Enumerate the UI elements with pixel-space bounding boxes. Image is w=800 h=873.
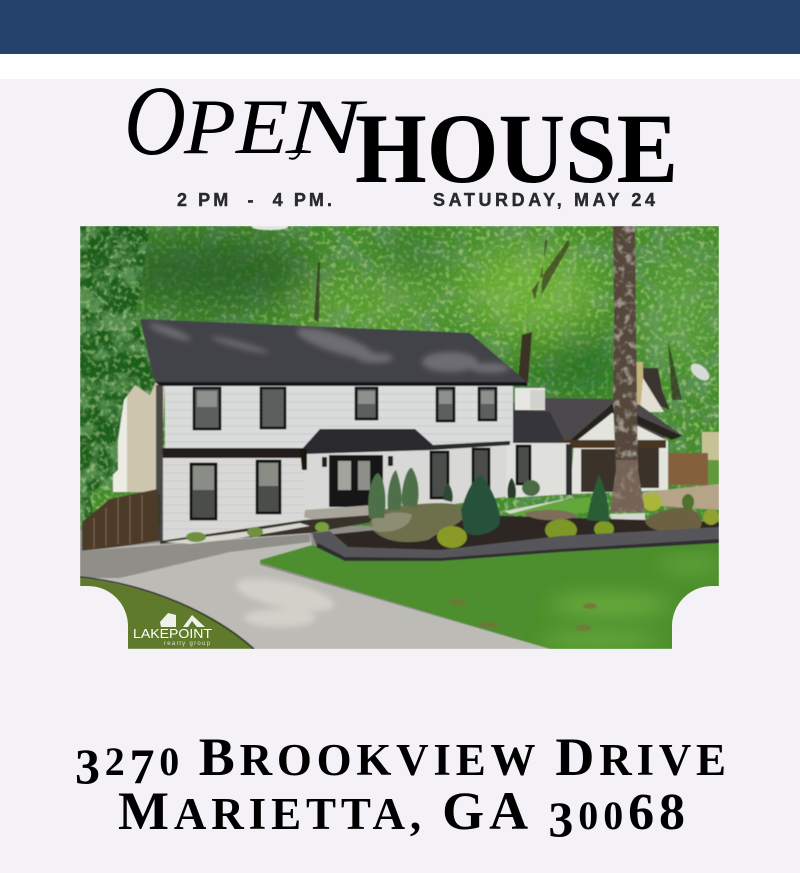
- white strip: [0, 54, 800, 79]
- boulders: [370, 503, 466, 542]
- address line 1: 7: [130, 738, 155, 794]
- bed strip under wall: [160, 515, 372, 544]
- top navy band: [0, 0, 800, 54]
- address line 2: 68: [628, 784, 685, 841]
- mulch bed: [325, 515, 719, 552]
- garage wing roof: [513, 398, 683, 443]
- address line 2: 00: [578, 793, 623, 838]
- address line 1: 2: [105, 739, 125, 784]
- title: Open House: HOUSE: [355, 93, 678, 204]
- right fence: [668, 453, 708, 485]
- house photo: [80, 224, 720, 649]
- address line 1: 3: [75, 738, 100, 794]
- wooden fence: [82, 489, 158, 552]
- garage wall: [570, 413, 668, 494]
- tree trunk: [610, 226, 646, 512]
- photo base: [80, 525, 539, 646]
- address line 1: BROOKVIEW DRIVE: [199, 727, 726, 787]
- title: Open House: PE: [183, 83, 288, 170]
- main lawn: [254, 538, 719, 649]
- title: Open House: N: [285, 83, 368, 170]
- driveway: [80, 533, 550, 649]
- side wall: [126, 382, 166, 493]
- upper windows: [194, 388, 496, 429]
- address line 1: 0: [159, 739, 194, 784]
- lower windows: [191, 446, 530, 519]
- time: 2 PM - 4 PM.: [177, 190, 332, 210]
- right drive: [630, 484, 719, 510]
- main roof: [140, 319, 528, 386]
- address line 2: MARIETTA, GA: [118, 781, 525, 841]
- gravel: [165, 497, 645, 544]
- upper siding: [165, 386, 513, 450]
- logo: LakePoint realty group: LAKEPOINT: [133, 626, 212, 641]
- neighbor house: [635, 362, 719, 462]
- left foliage: [80, 226, 156, 530]
- lower brick wall: [161, 446, 510, 541]
- date: SATURDAY, MAY 24: [433, 190, 655, 210]
- address line 2: 3: [548, 791, 573, 847]
- front door: [329, 455, 383, 507]
- title: Open House: [124, 65, 678, 204]
- left lawn: [80, 578, 254, 649]
- retaining wall: [312, 527, 719, 560]
- band and porch roof: [163, 448, 305, 458]
- small lawn: [512, 497, 590, 515]
- logo: LakePoint realty group: [133, 613, 212, 647]
- logo: LakePoint realty group: realty group: [164, 641, 211, 647]
- title: Open House: O: [124, 65, 186, 176]
- trees background: [80, 224, 719, 526]
- shrubs: [186, 468, 719, 548]
